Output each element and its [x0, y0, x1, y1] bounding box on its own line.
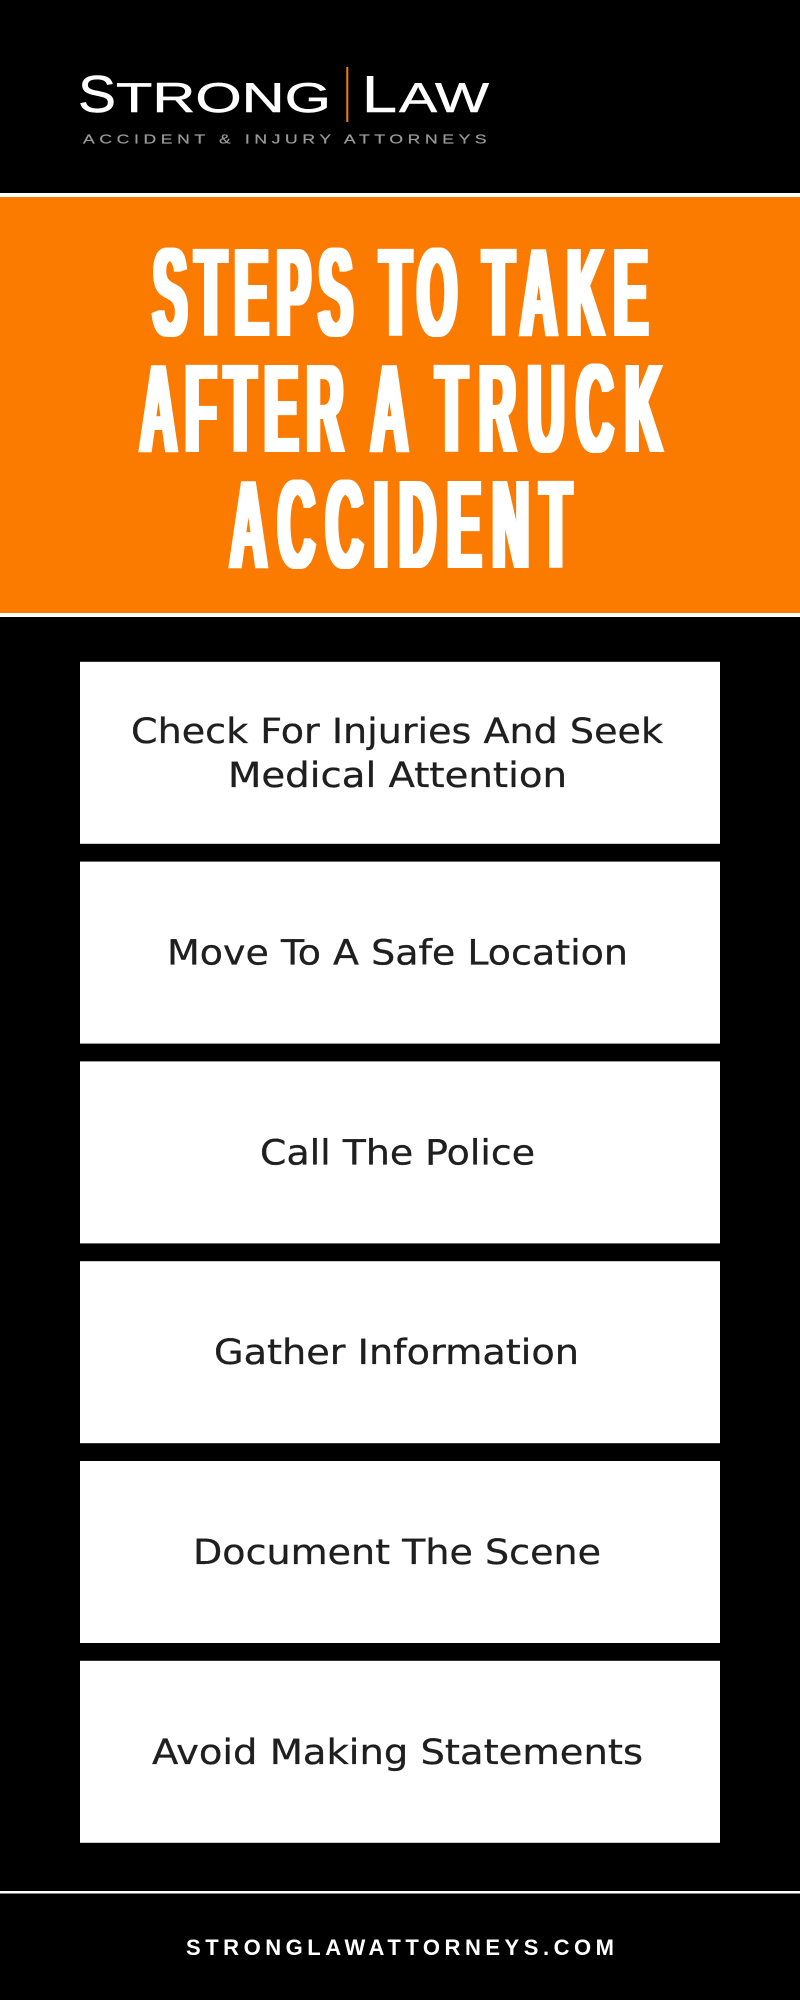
title banner [0, 193, 800, 617]
logo: Strong Law [78, 66, 489, 147]
footer website: STRONGLAWATTORNEYS.COM [186, 1935, 614, 1960]
title heading: AFTER [140, 339, 343, 480]
title heading: ACCIDENT [230, 455, 571, 596]
logo: Strong Law: ACCIDENT & INJURY ATTORNEYS [83, 133, 487, 147]
step 3 card [80, 1061, 720, 1243]
step 6 card: Avoid Making Statements [152, 1733, 643, 1773]
step 2 card: Move To A Safe Location [167, 934, 628, 974]
title heading: TAKE [483, 223, 648, 364]
step 4 card: Gather Information [214, 1333, 579, 1373]
logo: Strong Law: TRONG [116, 74, 331, 121]
title heading [140, 223, 662, 596]
title heading: STEPS [153, 223, 353, 364]
logo: Strong Law: L [362, 66, 397, 124]
step 4 card [80, 1261, 720, 1443]
logo: Strong Law: S [78, 66, 116, 124]
title heading: TRUCK [436, 339, 662, 480]
step 6 card [80, 1661, 720, 1843]
step 5 card [80, 1461, 720, 1643]
step 5 card: Document The Scene [193, 1533, 601, 1573]
title heading: A [371, 339, 408, 480]
logo: Strong Law: AW [399, 74, 489, 121]
step 3 card: Call The Police [260, 1133, 535, 1173]
step 1 card [80, 662, 720, 844]
step 1 card: Medical Attention [228, 756, 567, 796]
step 1 card: Check For Injuries And Seek [131, 712, 664, 752]
step 2 card [80, 862, 720, 1044]
title heading: TO [380, 223, 457, 364]
